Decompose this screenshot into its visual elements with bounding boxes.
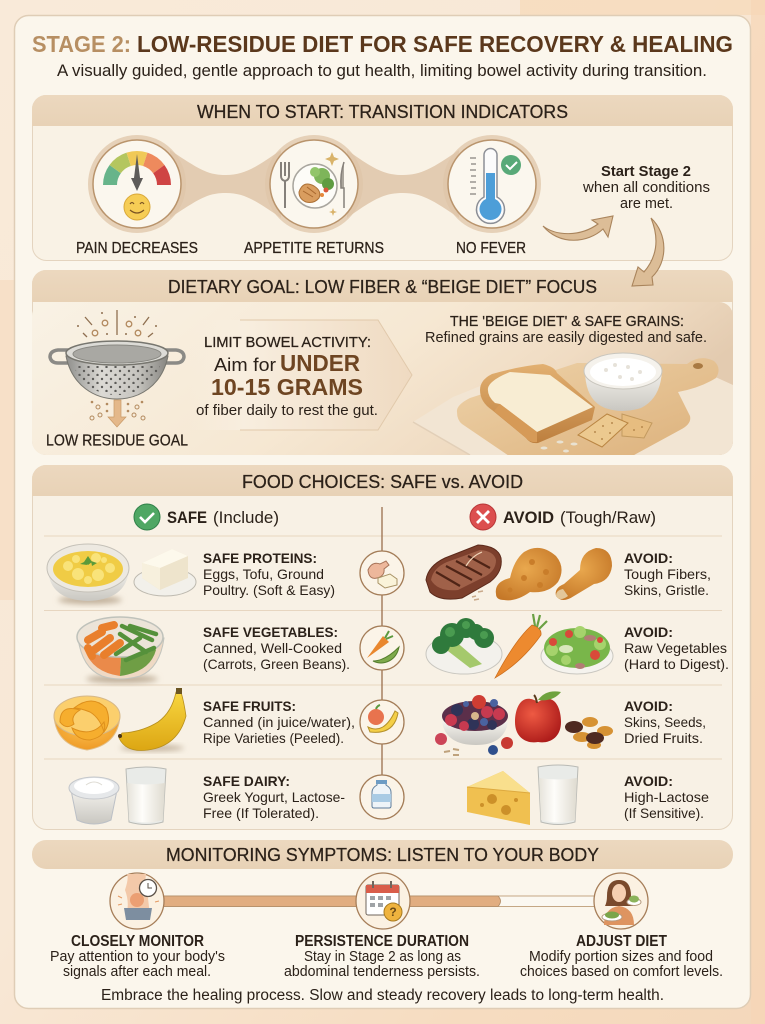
text: safe fruits: Canned (in juice/water),: [203, 714, 355, 730]
panel header: [32, 95, 733, 126]
step: adjust diet: ADJUST DIET: [576, 933, 667, 950]
text: safe dairy: Free (If Tolerated).: [203, 805, 319, 821]
row 4 safe: dairy: [69, 767, 345, 824]
avoid column heading: AVOID: [503, 508, 554, 527]
illustration: milk glass: [538, 765, 578, 824]
illustration: cheese: [467, 771, 530, 825]
row 2 safe: vegetables: [77, 617, 350, 683]
text: avoid tough: Tough Fibers,: [624, 566, 711, 582]
label: appetite returns: APPETITE RETURNS: [244, 240, 384, 257]
illustration: glass bowl carrots and beans: [77, 617, 164, 683]
step: closely monitor: signals after each meal.: [63, 964, 211, 980]
callout: start stage 2: when all conditions: [582, 180, 710, 196]
title: LOW-RESIDUE DIET FOR SAFE RECOVERY & HEALING: [137, 31, 733, 57]
illustration: apple: [515, 691, 561, 742]
row 3 avoid: seeds and skins: [435, 691, 706, 755]
text: avoid skins: Skins, Seeds,: [624, 714, 706, 730]
text: safe dairy: [203, 773, 345, 821]
step: closely monitor: [50, 933, 225, 980]
chevron callout: of fiber daily to rest the gut.: [196, 402, 378, 419]
step: adjust diet: choices based on comfort levels.: [520, 964, 723, 980]
panel header: WHEN TO START: TRANSITION INDICATORS: [197, 102, 568, 122]
connector band: [170, 150, 459, 218]
icon: thermometer: [443, 135, 541, 233]
label: low residue goal: LOW RESIDUE GOAL: [46, 432, 188, 450]
text: beige diet heading: THE 'BEIGE DIET' & SAFE GRAINS:: [450, 313, 684, 330]
text: safe vegetables: SAFE VEGETABLES:: [203, 624, 338, 640]
illustration: milk glass: [126, 767, 166, 824]
arrow: to start stage 2: [543, 216, 613, 240]
text: safe vegetables: Canned, Well-Cooked: [203, 640, 342, 656]
text: avoid skins: [624, 698, 706, 746]
text: avoid lactose: [624, 773, 709, 821]
text: safe dairy: Greek Yogurt, Lactose-: [203, 789, 345, 805]
chevron callout: [188, 320, 412, 430]
step: persistence duration: [284, 933, 480, 980]
text: safe fruits: SAFE FRUITS:: [203, 698, 296, 714]
illustration: canned peaches: [54, 696, 120, 750]
row 1 avoid: tough meats: [426, 545, 711, 600]
label: no fever: NO FEVER: [456, 240, 526, 257]
safe column heading: (Include): [213, 508, 279, 527]
header pill: [32, 840, 733, 869]
illustration: banana: [118, 688, 186, 751]
step: persistence duration: Stay in Stage 2 as long as: [304, 949, 461, 965]
progress bar: [160, 896, 600, 906]
text: avoid raw: Raw Vegetables: [624, 640, 727, 656]
text: avoid lactose: High-Lactose: [624, 789, 709, 805]
panel: dietary goal: [32, 270, 733, 460]
text: avoid skins: Dried Fruits.: [624, 730, 703, 746]
footer message: Embrace the healing process. Slow and steady recovery leads to long-term health.: [101, 987, 664, 1004]
panel header: FOOD CHOICES: SAFE vs. AVOID: [242, 472, 523, 492]
text: avoid raw: [624, 624, 729, 672]
callout: start stage 2: are met.: [620, 196, 673, 212]
text: avoid tough: [624, 550, 711, 598]
callout: start stage 2: Start Stage 2: [601, 164, 691, 180]
illustration: eggs bowl: [47, 544, 129, 604]
subtitle: A visually guided, gentle approach to gut health, limiting bowel activity during transition.: [57, 61, 707, 80]
chevron callout: Aim for: [214, 355, 276, 375]
text: safe proteins: [203, 550, 335, 598]
avoid column heading: [470, 504, 656, 530]
text: safe vegetables: [203, 624, 350, 672]
text: safe proteins: SAFE PROTEINS:: [203, 550, 317, 566]
header pill: MONITORING SYMPTOMS: LISTEN TO YOUR BODY: [166, 845, 599, 865]
text: safe proteins: Poultry. (Soft & Easy): [203, 582, 335, 598]
panel header: [32, 465, 733, 496]
icon: pain gauge: [88, 135, 186, 233]
text: safe fruits: [203, 698, 355, 746]
text: avoid tough: AVOID:: [624, 550, 673, 566]
icon: belly and clock: [110, 873, 164, 929]
centre icon: protein: [360, 551, 404, 595]
step: closely monitor: Pay attention to your body's: [50, 949, 225, 965]
text: avoid raw: AVOID:: [624, 624, 673, 640]
step: adjust diet: [520, 933, 723, 980]
panel: monitoring symptoms: [32, 840, 733, 980]
icon: appetite plate: [265, 135, 363, 233]
text: refined grains: Refined grains are easily digested and safe.: [425, 329, 707, 346]
panel: food choices: [32, 465, 733, 830]
centre icon: dairy: [360, 775, 404, 819]
illustration: yogurt cup: [69, 777, 119, 824]
text: avoid raw: (Hard to Digest).: [624, 656, 729, 672]
illustration: berries bowl: [435, 695, 513, 755]
step: persistence duration: abdominal tenderness persists.: [284, 964, 480, 980]
title: STAGE 2:: [32, 31, 131, 57]
chevron callout: LIMIT BOWEL ACTIVITY:: [204, 334, 371, 351]
icon: woman with food: [594, 873, 648, 929]
right scene backdrop: [32, 302, 733, 455]
row 4 avoid: high lactose: [467, 765, 709, 825]
text: safe vegetables: (Carrots, Green Beans).: [203, 656, 350, 672]
chevron callout: UNDER: [280, 350, 360, 376]
label: pain decreases: PAIN DECREASES: [76, 240, 198, 257]
text: avoid lactose: AVOID:: [624, 773, 673, 789]
chevron callout: 10-15 GRAMS: [211, 374, 363, 400]
centre icon: vegetables: [360, 626, 404, 670]
row 2 avoid: raw vegetables: [426, 614, 729, 678]
safe column heading: [134, 504, 279, 530]
illustration: salad plate: [541, 626, 613, 674]
illustration: tofu on plate: [134, 549, 196, 596]
row 3 safe: fruits: [54, 688, 355, 751]
centre icon: fruit: [360, 700, 404, 744]
illustration: cutting board with bread, rice, crackers: [457, 353, 719, 460]
avoid column heading: (Tough/Raw): [560, 508, 656, 527]
callout: start stage 2: [582, 164, 710, 212]
text: avoid lactose: (If Sensitive).: [624, 805, 704, 821]
text: safe proteins: Eggs, Tofu, Ground: [203, 566, 324, 582]
illustration: broccoli plate: [426, 618, 502, 674]
illustration: raw carrot: [495, 614, 547, 678]
arrow: to dietary goal: [632, 218, 664, 286]
icon: colander: [50, 310, 184, 427]
step: closely monitor: CLOSELY MONITOR: [71, 933, 204, 950]
text: safe fruits: Ripe Varieties (Peeled).: [203, 730, 344, 746]
illustration: steak: [426, 545, 501, 600]
panel: when to start: [32, 95, 733, 260]
illustration: dried fruit: [565, 717, 613, 749]
step: adjust diet: Modify portion sizes and food: [529, 949, 713, 965]
illustration: drumstick: [556, 548, 612, 600]
row 1 safe: proteins: [47, 544, 335, 604]
text: avoid skins: AVOID:: [624, 698, 673, 714]
icon: calendar: ?: [389, 905, 397, 919]
safe column heading: SAFE: [167, 508, 207, 527]
panel header: DIETARY GOAL: LOW FIBER & “BEIGE DIET” FOCUS: [168, 277, 597, 297]
panel header: [32, 270, 733, 302]
icon: calendar: [356, 873, 410, 929]
illustration: fried chicken: [496, 548, 562, 600]
text: avoid tough: Skins, Gristle.: [624, 582, 709, 598]
step: persistence duration: PERSISTENCE DURATION: [295, 933, 469, 950]
text: safe dairy: SAFE DAIRY:: [203, 773, 290, 789]
